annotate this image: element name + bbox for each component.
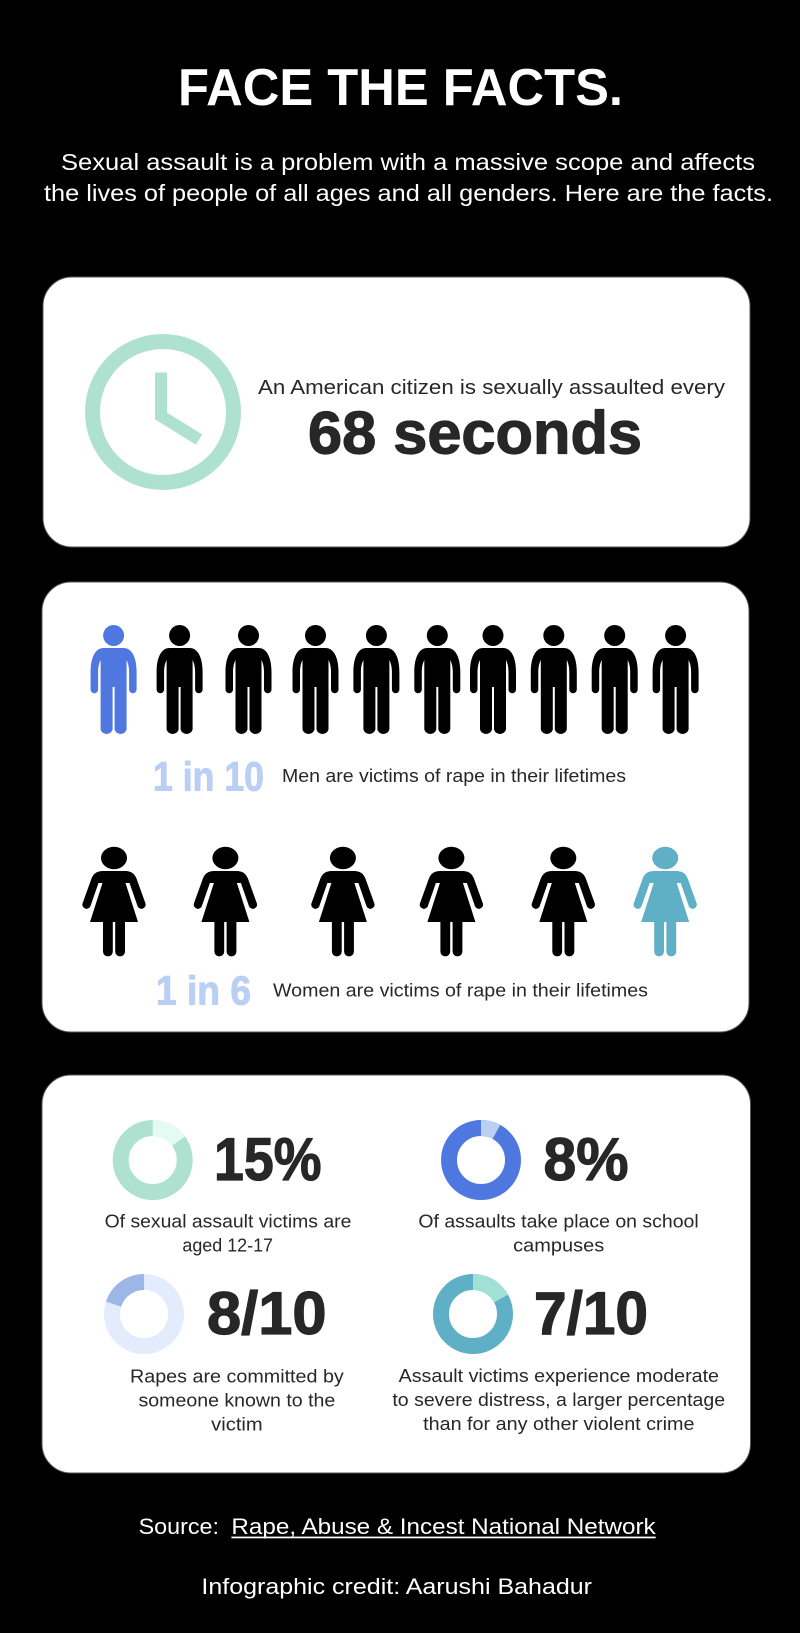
stat: 1 in 10: 1 in 10: [153, 754, 264, 800]
stat: 7/10: 7/10: [534, 1280, 648, 1347]
title: FACE THE FACTS.: [178, 59, 623, 117]
stat: 8%: 8%: [544, 1126, 628, 1193]
caption: 8%: [418, 1212, 699, 1256]
caption: 15%: aged 12-17: [182, 1236, 273, 1256]
caption: 15%: Of sexual assault victims are: [105, 1212, 351, 1232]
caption: 8/10: victim: [211, 1415, 263, 1435]
caption: 7/10: than for any other violent crime: [423, 1414, 694, 1434]
panel: 1 in 10 men and 1 in 6 women: [42, 582, 749, 1032]
caption: 8/10: [130, 1367, 344, 1435]
caption: 7/10: to severe distress, a larger percentage: [392, 1390, 725, 1410]
big stat: 68 seconds: 68 seconds: [308, 400, 642, 466]
infographic credit: Infographic credit: Aarushi Bahadur: [201, 1574, 592, 1599]
statement text: An American citizen is sexually assaulted every: [258, 376, 726, 399]
caption: 8/10: someone known to the: [138, 1391, 335, 1411]
stat: 15%: 15%: [214, 1126, 322, 1193]
panel: statistics: [42, 1075, 750, 1473]
caption: 7/10: [392, 1366, 725, 1434]
caption: 8%: campuses: [513, 1236, 604, 1256]
caption: 8%: Of assaults take place on school: [418, 1212, 699, 1232]
label: men: Men are victims of rape in their lifetimes: [282, 766, 626, 786]
caption: 8/10: Rapes are committed by: [130, 1367, 344, 1387]
donut: 8/10: [104, 1274, 184, 1354]
stat: 1 in 6: 1 in 6: [156, 967, 251, 1013]
men pictogram row: [91, 625, 699, 734]
caption: 15%: [105, 1212, 351, 1256]
stat: 8/10: 8/10: [207, 1280, 326, 1347]
source line: Source:: [139, 1514, 219, 1539]
source line: Rape, Abuse & Incest National Network: [231, 1514, 657, 1539]
icon: clock: [92, 342, 234, 482]
intro text: [44, 149, 773, 206]
intro text: Sexual assault is a problem with a massive scope and affects: [61, 149, 755, 175]
intro text: the lives of people of all ages and all genders. Here are the facts.: [44, 180, 773, 206]
donut: 7/10: [441, 1282, 505, 1346]
caption: 7/10: Assault victims experience moderate: [399, 1366, 719, 1386]
donut: 8%: [449, 1128, 513, 1192]
label: women: Women are victims of rape in their lifetimes: [273, 980, 648, 1000]
panel: 68 seconds: [43, 277, 750, 547]
women pictogram row: [82, 847, 697, 956]
donut: 15%: [121, 1128, 185, 1192]
